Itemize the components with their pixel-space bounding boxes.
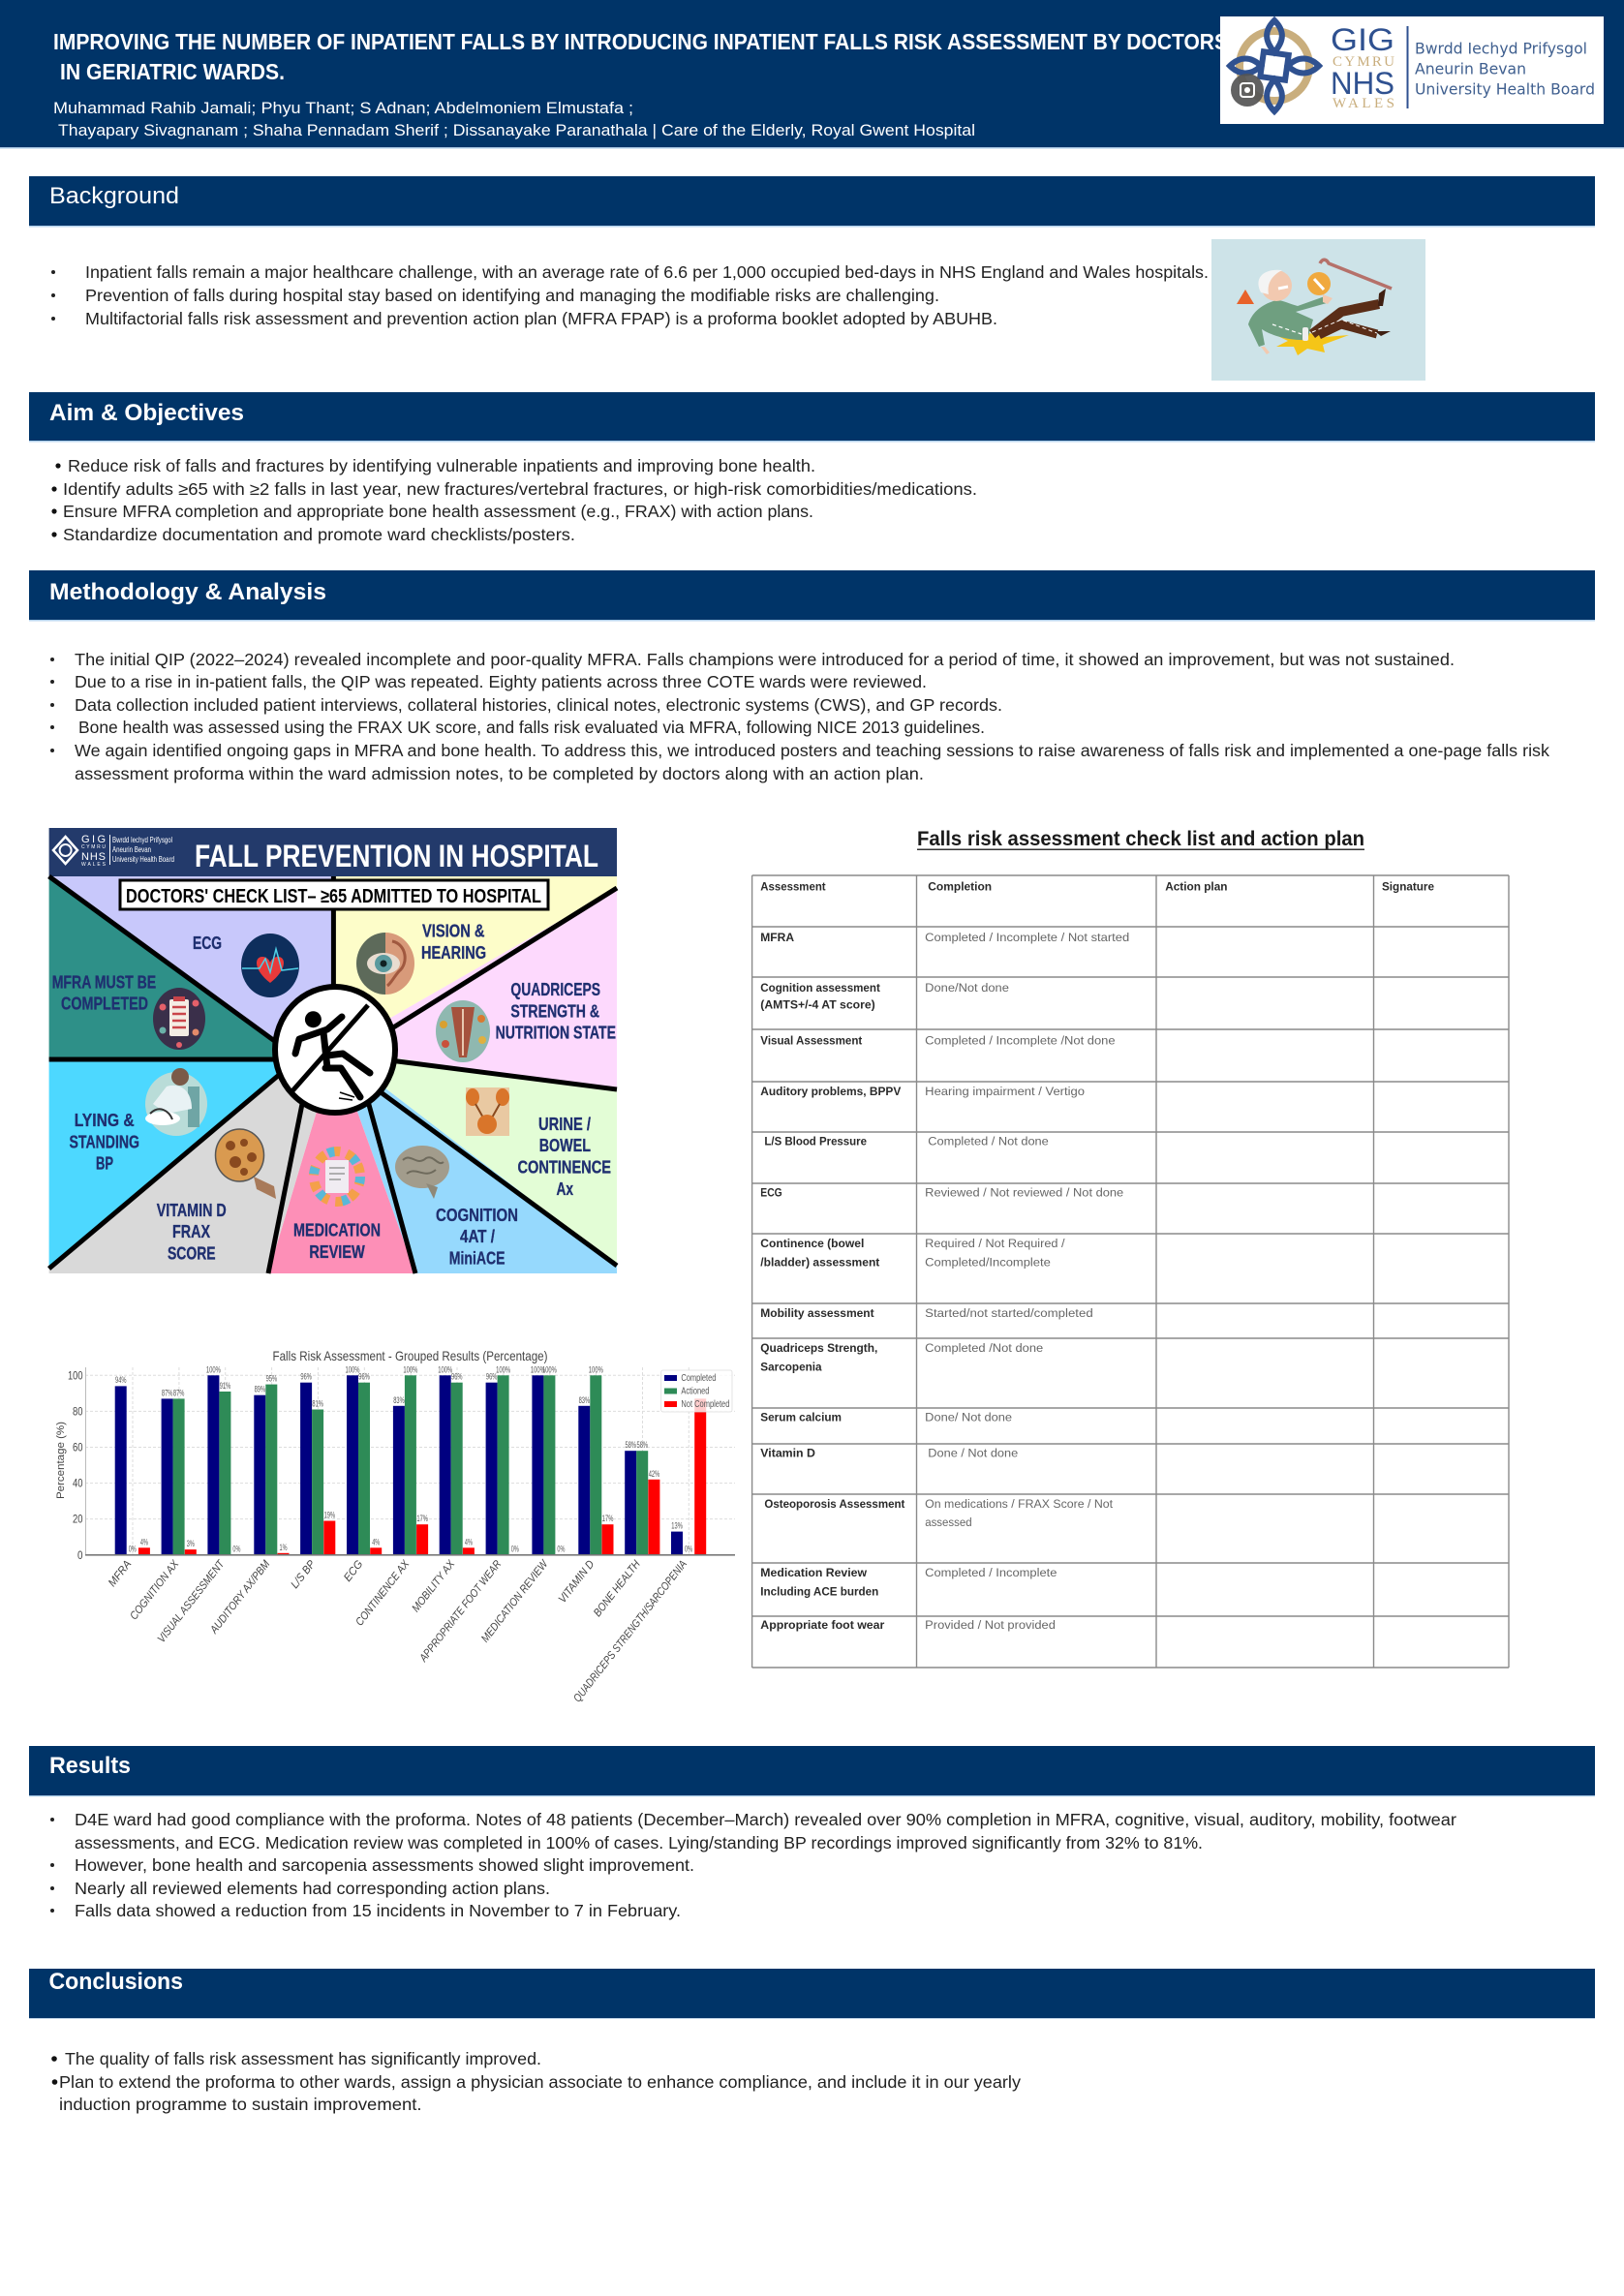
table completion options: assessed [925,1515,972,1529]
label: Urine / bowel continence Ax: BOWEL [539,1136,591,1155]
methodology bullets: Due to a rise in in-patient falls, the QIP was repeated. Eighty patients across three COTE wards were reviewed. [75,672,927,691]
bar value labels: 0% [557,1544,565,1553]
results bullets: Falls data showed a reduction from 15 incidents in November to 7 in February. [75,1901,681,1920]
bar value labels: 19% [324,1511,335,1520]
label: ECG: ECG [193,934,222,953]
section heading: Background [29,176,1595,227]
table header row: Completion [928,879,992,893]
y axis ticks and label: 0 [77,1548,83,1562]
label: Lying and standing BP [70,1111,139,1174]
methodology bullets: Data collection included patient interviews, collateral histories, clinical notes, electronic systems (CWS), and GP records. [75,695,1002,715]
table row labels: L/S Blood Pressure [764,1135,867,1148]
bar value labels: 89% [255,1385,265,1394]
bar value labels: 87% [173,1388,184,1397]
bar value labels: 96% [300,1372,312,1382]
panel: aim and objectives [29,392,1595,544]
label: Urine / bowel continence Ax: Ax [556,1179,573,1199]
chart title: Falls Risk Assessment - Grouped Results (Percentage) [273,1348,548,1363]
bar value labels: 17% [602,1514,613,1523]
table completion options: On medications / FRAX Score / Not [925,1497,1114,1511]
bar value labels: 13% [671,1521,683,1531]
bar value labels: 0% [685,1544,692,1553]
y axis ticks and label: 80 [73,1404,83,1418]
bar value labels: 91% [220,1381,230,1391]
table row labels: Mobility assessment [760,1306,874,1320]
table row labels: MFRA [760,931,794,944]
x axis category labels: MOBILITY AX [411,1558,458,1614]
conclusions bullets: The quality of falls risk assessment has significantly improved. [65,2049,541,2068]
conclusions bullets: Plan to extend the proforma to other wards, assign a physician associate to enhance compliance, and include it in our yearly [59,2072,1021,2092]
y axis ticks and label: 100 [68,1369,83,1383]
section heading: Aim & Objectives: Aim & Objectives [49,400,244,426]
section heading: Background: Background [49,183,179,209]
y axis ticks and label: 20 [73,1513,83,1526]
icon: quadriceps and food [436,1000,490,1062]
table completion options: Completed / Incomplete / Not started [925,931,1129,944]
section heading: Methodology & Analysis: Methodology & Analysis [49,579,326,605]
poster header: FALL PREVENTION IN HOSPITAL [195,839,598,873]
table completion options: Completed / Not done [928,1135,1049,1148]
bar value labels: 95% [266,1374,277,1384]
aim bullets [51,456,977,544]
label: Vitamin D FRAX score: SCORE [168,1244,216,1264]
logo: GIG Cymru NHS Wales, Aneurin Bevan: GIG [1331,22,1394,57]
bars: Completed [115,1375,683,1555]
bar value labels: 17% [416,1514,428,1523]
results bullets: However, bone health and sarcopenia assessments showed slight improvement. [75,1855,694,1875]
background bullets: Multifactorial falls risk assessment and prevention action plan (MFRA FPAP) is a proforma booklet adopted by ABUHB. [85,309,997,328]
bar value labels: 87% [162,1388,172,1397]
label: Vision and hearing [421,922,486,963]
bar value labels: 83% [579,1395,590,1405]
section heading: Results: Results [49,1753,131,1779]
bar value labels: 83% [393,1395,405,1405]
table row labels: Continence (bowel [760,1237,864,1250]
results bullets: Nearly all reviewed elements had corresponding action plans. [75,1879,550,1898]
poster header: CYMRU [81,844,106,850]
bar value labels: 58% [637,1440,648,1450]
poster header: University Health Board [112,855,174,864]
logo: GIG Cymru NHS Wales, Aneurin Bevan [1220,16,1604,124]
poster divider lines [49,876,617,1273]
logo: GIG Cymru NHS Wales, Aneurin Bevan: WALES [1333,96,1394,111]
poster header: Bwrdd Iechyd Prifysgol [112,836,172,844]
table completion options: Done/Not done [925,981,1009,995]
bar value labels: 100% [403,1364,417,1374]
results bullets [50,1810,1456,1920]
icon: pills and prescription [314,1151,360,1202]
x axis category labels: MEDICATION REVIEW [479,1558,551,1644]
background bullets: Prevention of falls during hospital stay based on identifying and managing the modifiable risks are challenging. [85,286,939,305]
x axis category labels: CONTINENCE AX [353,1558,413,1628]
chart legend [661,1370,732,1412]
table row labels: Cognition assessment [760,981,880,995]
table completion options: Completed/Incomplete [925,1255,1051,1269]
bar value labels: 100% [438,1364,452,1374]
methodology bullets: The initial QIP (2022–2024) revealed incomplete and poor-quality MFRA. Falls champions were introduced for a period of time, it showed an improvement, but was not sustained. [75,650,1455,669]
table completion options [925,931,1129,1632]
icon: blood pressure check [145,1068,207,1136]
bar value labels: 0% [511,1544,519,1553]
section heading: Aim & Objectives [29,392,1595,442]
y axis ticks and label: Percentage (%) [55,1422,67,1499]
aim bullets: Identify adults ≥65 with ≥2 falls in last year, new fractures/vertebral fractures, or high-risk comorbidities/medications. [63,479,977,499]
background bullets [51,262,1209,328]
bar value labels: 100% [531,1364,545,1374]
table row labels: /bladder) assessment [760,1255,879,1269]
logo: GIG Cymru NHS Wales, Aneurin Bevan: Aneurin Bevan [1415,60,1526,78]
title: IN GERIATRIC WARDS. [60,59,285,84]
table row labels: Quadriceps Strength, [760,1341,877,1355]
table header row: Signature [1382,879,1434,893]
label: Cognition 4AT / MiniACE: COGNITION [436,1206,518,1225]
label: Urine / bowel continence Ax: URINE / [538,1115,591,1134]
table completion options: Required / Not Required / [925,1237,1065,1250]
authors: Thayapary Sivagnanam ; Shaha Pennadam Sherif ; Dissanayake Paranathala | Care of the Elderly, Royal Gwent Hospital [58,122,975,139]
poster header [49,828,617,876]
bars: Actioned [173,1375,648,1555]
table header row [760,879,1434,893]
logo: GIG Cymru NHS Wales, Aneurin Bevan: CYMRU [1333,54,1394,70]
label: Urine / bowel continence Ax: CONTINENCE [517,1158,611,1178]
label: Cognition 4AT / MiniACE: MiniACE [449,1249,506,1269]
title [53,29,1228,84]
title: IMPROVING THE NUMBER OF INPATIENT FALLS BY INTRODUCING INPATIENT FALLS RISK ASSESSMENT BY DOCTORS [53,29,1228,54]
poster wedges [49,876,617,1273]
checklist banner: DOCTORS' CHECK LIST– ≥65 ADMITTED TO HOSPITAL [126,886,541,907]
panel: results [29,1746,1595,1920]
poster header: GIG [81,834,106,845]
x axis category labels: VISUAL ASSESSMENT [156,1558,228,1645]
section heading: Conclusions: Conclusions [48,1969,183,1995]
label: Lying and standing BP: STANDING [70,1133,139,1152]
label: Vitamin D FRAX score: FRAX [172,1222,210,1241]
label: MFRA must be completed [52,973,156,1014]
bar value labels: 1% [279,1543,287,1552]
bar value labels: 100% [206,1364,221,1374]
label: MFRA must be completed: COMPLETED [61,995,148,1014]
header banner [0,0,1624,149]
authors [53,100,975,139]
table header row: Assessment [760,879,826,893]
y axis ticks and label: 40 [73,1476,83,1489]
panel: falls risk assessment check list [752,828,1509,1668]
checklist banner [120,880,548,909]
table completion options: Started/not started/completed [925,1306,1093,1320]
conclusions bullets [51,2049,1021,2114]
section heading: Results [29,1746,1595,1796]
table row labels: Sarcopenia [760,1361,822,1374]
icon: ECG heart [241,934,299,997]
table completion options: Completed / Incomplete /Not done [925,1034,1116,1048]
panel: background [29,176,1595,381]
label: Lying and standing BP: LYING & [75,1111,135,1130]
table completion options: Done / Not done [928,1446,1018,1459]
icon: elderly man falling [1211,239,1425,381]
bar value labels: 4% [140,1537,148,1546]
poster header: WALES [81,862,107,868]
bars: Not Completed [138,1398,706,1555]
aim bullets: Standardize documentation and promote ward checklists/posters. [63,525,575,544]
bar value labels: 96% [451,1372,463,1382]
table completion options: Done/ Not done [925,1411,1012,1424]
bar value labels: 100% [345,1364,360,1374]
bar value labels: 4% [465,1537,473,1546]
label: Medication review: REVIEW [309,1242,365,1262]
bar value labels: 100% [542,1364,557,1374]
table row labels: Appropriate foot wear [760,1618,885,1632]
label: Lying and standing BP: BP [96,1154,113,1174]
results bullets: D4E ward had good compliance with the proforma. Notes of 48 patients (December–March) revealed over 90% completion in MFRA, cognitive, visual, auditory, mobility, footwear [75,1810,1456,1829]
chart legend: Actioned [681,1387,709,1396]
table grid [752,875,1509,1668]
y axis ticks and label [55,1369,83,1562]
chart legend: Not Completed [681,1399,729,1410]
section heading: Conclusions [29,1969,1595,2019]
icon: MFRA clipboard [153,988,205,1050]
bar value labels: 81% [312,1398,323,1408]
methodology bullets [50,650,1549,783]
table row labels: Medication Review [760,1566,868,1579]
x axis category labels: MFRA [107,1558,135,1589]
background bullets: Inpatient falls remain a major healthcare challenge, with an average rate of 6.6 per 1,000 occupied bed-days in NHS England and Wales hospitals. [85,262,1209,282]
bar value labels: 100% [589,1364,603,1374]
table row labels: Including ACE burden [760,1585,878,1599]
label: Cognition 4AT / MiniACE [436,1206,518,1269]
x axis category labels: L/S BP [290,1558,319,1591]
label: Vitamin D FRAX score: VITAMIN D [157,1201,227,1220]
logo: GIG Cymru NHS Wales, Aneurin Bevan: University Health Board [1415,79,1595,98]
label: Quadriceps strength and nutrition state: QUADRICEPS [510,980,600,999]
results bullets: assessments, and ECG. Medication review was completed in 100% of cases. Lying/standing BP recordings improved significantly from 32% to 81%. [75,1833,1203,1852]
logo: GIG Cymru NHS Wales, Aneurin Bevan: NHS [1331,66,1394,101]
bar value labels: 96% [358,1372,370,1382]
x axis category labels: COGNITION AX [128,1558,182,1622]
table completion options: Completed /Not done [925,1341,1043,1355]
bar value labels: 3% [187,1539,195,1548]
conclusions bullets: induction programme to sustain improvement. [59,2095,421,2114]
methodology bullets: Bone health was assessed using the FRAX UK score, and falls risk evaluated via MFRA, following NICE 2013 guidelines. [78,718,985,737]
bar value labels [115,1364,692,1553]
aim bullets: Ensure MFRA completion and appropriate bone health assessment (e.g., FRAX) with action plans. [63,502,813,521]
table header row: Action plan [1165,879,1228,893]
bar value labels: 0% [232,1544,240,1553]
logo: GIG Cymru NHS Wales, Aneurin Bevan: Bwrdd Iechyd Prifysgol [1415,40,1587,58]
panel: fall prevention in hospital poster [49,828,617,1273]
label: Quadriceps strength and nutrition state: STRENGTH & [510,1002,599,1022]
y axis ticks and label: 60 [73,1441,83,1454]
bar value labels: 58% [626,1440,636,1450]
label: Medication review: MEDICATION [293,1221,381,1240]
icon: bone under magnifier [215,1129,276,1199]
panel: conclusions [29,1969,1595,2114]
label: Quadriceps strength and nutrition state: NUTRITION STATE [496,1024,616,1043]
label: Vitamin D FRAX score [157,1201,227,1264]
x axis category labels: AUDITORY AX/PBM [208,1558,273,1637]
table row labels: (AMTS+/-4 AT score) [760,998,875,1012]
chart legend: Completed [681,1373,716,1384]
label: Vision and hearing: VISION & [422,922,484,941]
aim bullets: Reduce risk of falls and fractures by identifying vulnerable inpatients and improving bone health. [68,456,815,475]
table completion options: Provided / Not provided [925,1618,1056,1632]
table row labels [760,931,904,1632]
x axis category labels: BONE HEALTH [592,1558,643,1619]
section heading: Methodology & Analysis [29,570,1595,622]
methodology bullets: We again identified ongoing gaps in MFRA and bone health. To address this, we introduced posters and teaching sessions to raise awareness of falls risk and implemented a one-page falls risk [75,741,1549,760]
icon: eye and ear [356,933,414,995]
bar value labels: 96% [486,1372,497,1382]
bar value labels: 42% [649,1469,659,1479]
table completion options: Reviewed / Not reviewed / Not done [925,1185,1123,1199]
table completion options: Hearing impairment / Vertigo [925,1085,1085,1098]
authors: Muhammad Rahib Jamali; Phyu Thant; S Adnan; Abdelmoniem Elmustafa ; [53,100,633,117]
icon: brain [395,1146,449,1199]
table completion options: Completed / Incomplete [925,1566,1057,1579]
table row labels: Auditory problems, BPPV [760,1085,902,1098]
x axis category labels: VITAMIN D [557,1558,597,1606]
icon: urinary system [466,1087,509,1136]
label: MFRA must be completed: MFRA MUST BE [52,973,156,993]
label: Cognition 4AT / MiniACE: 4AT / [460,1227,495,1246]
label: Medication review [293,1221,381,1262]
table row labels: Osteoporosis Assessment [764,1497,904,1511]
x axis category labels: ECG [342,1558,365,1584]
table row labels: Serum calcium [760,1411,842,1424]
table row labels: Visual Assessment [760,1034,862,1048]
table row labels: Vitamin D [760,1446,815,1459]
x axis category labels: QUADRICEPS STRENGTH/SARCOPENIA [571,1558,689,1704]
bar value labels: 0% [129,1544,137,1553]
bar value labels: 94% [115,1375,126,1385]
y axis gridlines [85,1367,735,1554]
label: Urine / bowel continence Ax [517,1115,611,1199]
panel: methodology and analysis [29,570,1595,783]
table title: Falls risk assessment check list and action plan [917,828,1364,850]
x axis category labels: APPROPRIATE FOOT WEAR [417,1558,504,1665]
poster header: Aneurin Bevan [112,845,151,854]
bar value labels: 4% [372,1537,380,1546]
methodology bullets: assessment proforma within the ward admission notes, to be completed by doctors along with an action plan. [75,764,924,783]
label: Quadriceps strength and nutrition state [496,980,616,1043]
panel: grouped bar chart [55,1348,735,1704]
x axis category labels [107,1558,689,1704]
table row labels: ECG [760,1185,782,1199]
poster header: NHS [81,851,106,863]
label: Vision and hearing: HEARING [421,943,486,963]
bar value labels: 100% [496,1364,510,1374]
axis lines [85,1367,735,1556]
icon: no falling sign [275,987,395,1113]
